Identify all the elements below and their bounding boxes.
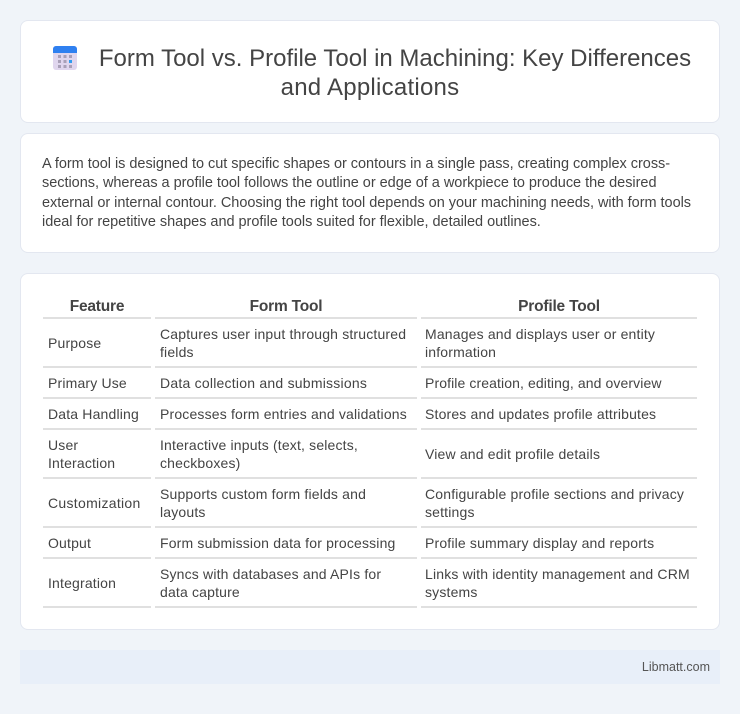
comparison table: Primary Use (48, 375, 127, 391)
intro text: A form tool is designed to cut specific shapes or contours in a single pass, creating complex cross- (42, 156, 670, 172)
comparison table: View and edit profile details (425, 446, 600, 462)
footer text: Libmatt.com (642, 660, 710, 674)
comparison table: data capture (160, 584, 240, 600)
comparison table: layouts (160, 504, 206, 520)
comparison table: Feature (70, 298, 124, 315)
table panel (20, 273, 720, 630)
table header (70, 298, 600, 315)
header panel (20, 20, 720, 123)
comparison table: Interactive inputs (text, selects, (160, 437, 358, 453)
comparison table: User (48, 437, 78, 453)
comparison table: settings (425, 504, 475, 520)
comparison table: Supports custom form fields and (160, 486, 366, 502)
row: Data Handling (48, 406, 656, 422)
comparison table: Data collection and submissions (160, 375, 367, 391)
row: Customization (48, 486, 684, 520)
comparison table: Processes form entries and validations (160, 406, 407, 422)
title: Form Tool vs. Profile Tool in Machining: Key Differences (99, 45, 691, 72)
intro text: external or internal contour. Choosing the right tool depends on your machining needs, with form tools (42, 195, 691, 211)
row: Purpose (48, 326, 655, 360)
row: Integration (48, 566, 690, 600)
comparison table: Form Tool (250, 298, 322, 315)
comparison table: Profile Tool (518, 298, 600, 315)
comparison table: Captures user input through structured (160, 326, 406, 342)
row: Primary Use (48, 375, 662, 391)
comparison table: Data Handling (48, 406, 139, 422)
comparison table: systems (425, 584, 478, 600)
title: and Applications (281, 74, 459, 101)
comparison table: checkboxes) (160, 455, 240, 471)
comparison table: Manages and displays user or entity (425, 326, 655, 342)
comparison table: Purpose (48, 335, 101, 351)
comparison table: Syncs with databases and APIs for (160, 566, 381, 582)
comparison table: information (425, 344, 496, 360)
intro panel (20, 133, 720, 253)
comparison table: Configurable profile sections and privacy (425, 486, 684, 502)
comparison table: Customization (48, 495, 141, 511)
comparison table: Form submission data for processing (160, 535, 396, 551)
footer bar (20, 650, 720, 684)
intro text: ideal for repetitive shapes and profile tools suited for flexible, detailed outlines. (42, 214, 541, 230)
title (99, 45, 691, 101)
comparison table (43, 298, 697, 608)
intro text (42, 156, 691, 230)
row: Output (48, 535, 654, 551)
comparison table: Links with identity management and CRM (425, 566, 690, 582)
comparison table: Interaction (48, 455, 115, 471)
comparison table: Output (48, 535, 91, 551)
comparison table: fields (160, 344, 194, 360)
row: User Interaction (48, 437, 600, 471)
comparison table: Profile creation, editing, and overview (425, 375, 662, 391)
icon: calendar (53, 46, 77, 70)
comparison table: Integration (48, 575, 116, 591)
intro text: sections, whereas a profile tool follows the outline or edge of a workpiece to produce the desired (42, 175, 656, 191)
comparison table: Stores and updates profile attributes (425, 406, 656, 422)
comparison table: Profile summary display and reports (425, 535, 654, 551)
